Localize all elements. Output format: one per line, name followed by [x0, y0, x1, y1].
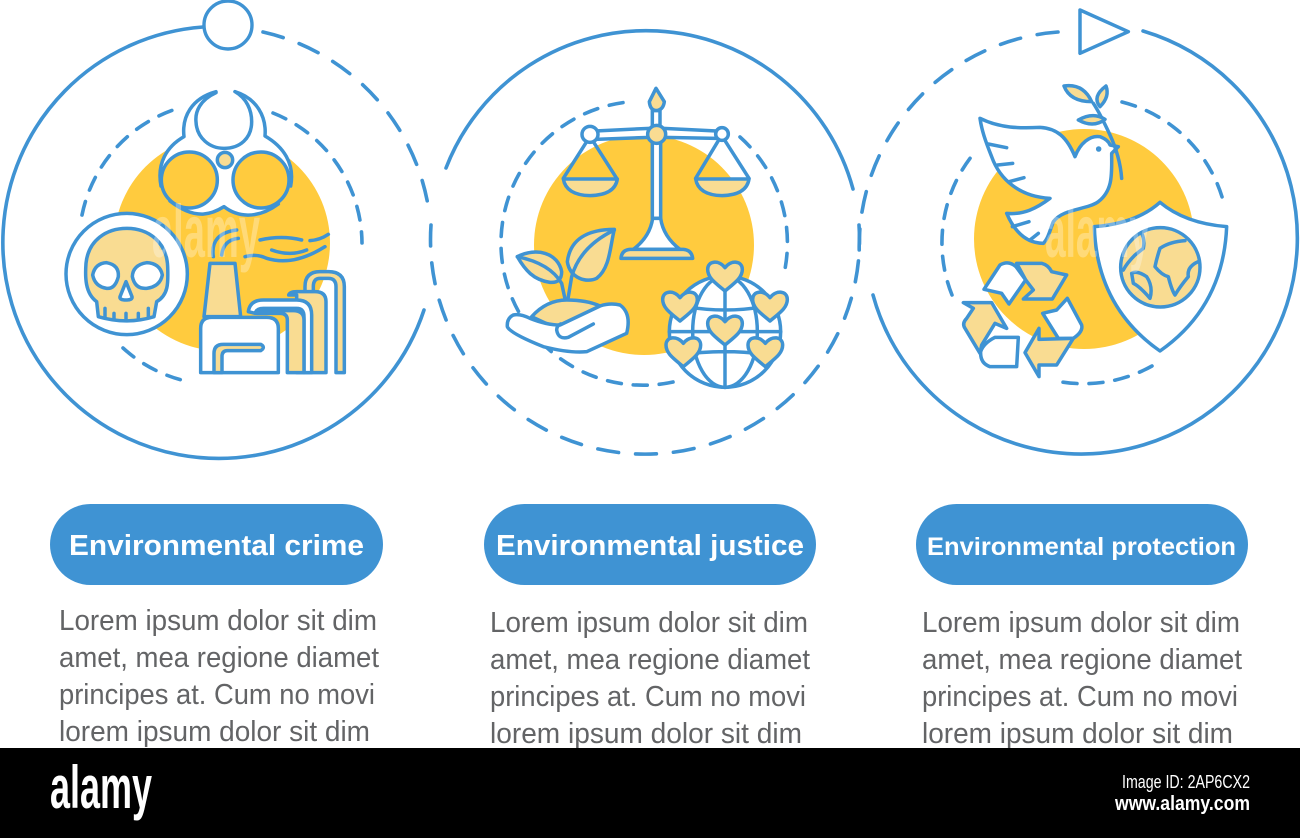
text block: justice: amet, mea regione diamet [490, 644, 810, 676]
icon: dove with branch [980, 86, 1122, 243]
step marker triangle [1080, 10, 1128, 53]
watermark left: alamy [152, 190, 260, 273]
panel: environmental protection [859, 10, 1297, 750]
icons: crime [66, 92, 344, 373]
icon: shield with earth [1094, 202, 1227, 351]
text block: justice: principes at. Cum no movi [490, 681, 806, 713]
icon: globe with hearts [663, 262, 787, 387]
text block: crime: Lorem ipsum dolor sit dim [59, 605, 377, 637]
outer ring [859, 31, 1297, 454]
icon: hand with plant [507, 229, 628, 352]
website: www.alamy.com [1114, 793, 1250, 815]
icon: biohazard [160, 92, 292, 215]
text block: protection: Lorem ipsum dolor sit dim [922, 607, 1240, 639]
heart [663, 292, 697, 321]
outer ring [430, 31, 860, 454]
text block: protection: amet, mea regione diamet [922, 644, 1242, 676]
text block: crime: amet, mea regione diamet [59, 642, 379, 674]
panel: environmental crime [3, 1, 428, 748]
watermark right: alamy [1045, 190, 1150, 273]
heart [748, 338, 783, 367]
inner dashed ring [942, 102, 1225, 384]
icon: scales [563, 88, 749, 258]
yellow disc [974, 129, 1194, 349]
text block: protection: lorem ipsum dolor sit dim [922, 718, 1233, 750]
text block: crime: lorem ipsum dolor sit dim [59, 716, 370, 748]
footer bar [0, 748, 1300, 838]
icon: skull badge [66, 213, 187, 335]
icons: protection [963, 10, 1227, 377]
heading pill: Environmental justice: Environmental justice [496, 530, 804, 562]
icon: recycling arrows [963, 263, 1082, 377]
logo: alamy: alamy [50, 754, 152, 821]
heart [753, 292, 787, 321]
yellow disc [114, 135, 330, 351]
text block: protection [922, 607, 1242, 750]
image id: Image ID: 2AP6CX2 [1122, 772, 1250, 792]
heading pill: Environmental protection: Environmental protection [927, 533, 1236, 561]
heart [708, 262, 742, 291]
inner dashed ring [501, 102, 787, 385]
inner dashed ring [82, 110, 362, 382]
text block: crime [59, 605, 379, 748]
step marker circle [204, 1, 252, 49]
text block: justice [490, 607, 810, 750]
heading pill: Environmental justice [484, 504, 816, 585]
heading pill: Environmental crime: Environmental crime [69, 530, 364, 562]
heading pill: Environmental protection [916, 504, 1248, 585]
heart [666, 338, 701, 367]
text block: justice: Lorem ipsum dolor sit dim [490, 607, 808, 639]
panel: environmental justice [430, 31, 860, 750]
heading pill: Environmental crime [50, 504, 383, 585]
outer ring [3, 27, 428, 458]
yellow disc [534, 135, 754, 355]
text block: crime: principes at. Cum no movi [59, 679, 375, 711]
text block: protection: principes at. Cum no movi [922, 681, 1238, 713]
heart [708, 316, 742, 345]
icon: factory [201, 230, 344, 373]
text block: justice: lorem ipsum dolor sit dim [490, 718, 802, 750]
icons: justice [507, 88, 787, 387]
